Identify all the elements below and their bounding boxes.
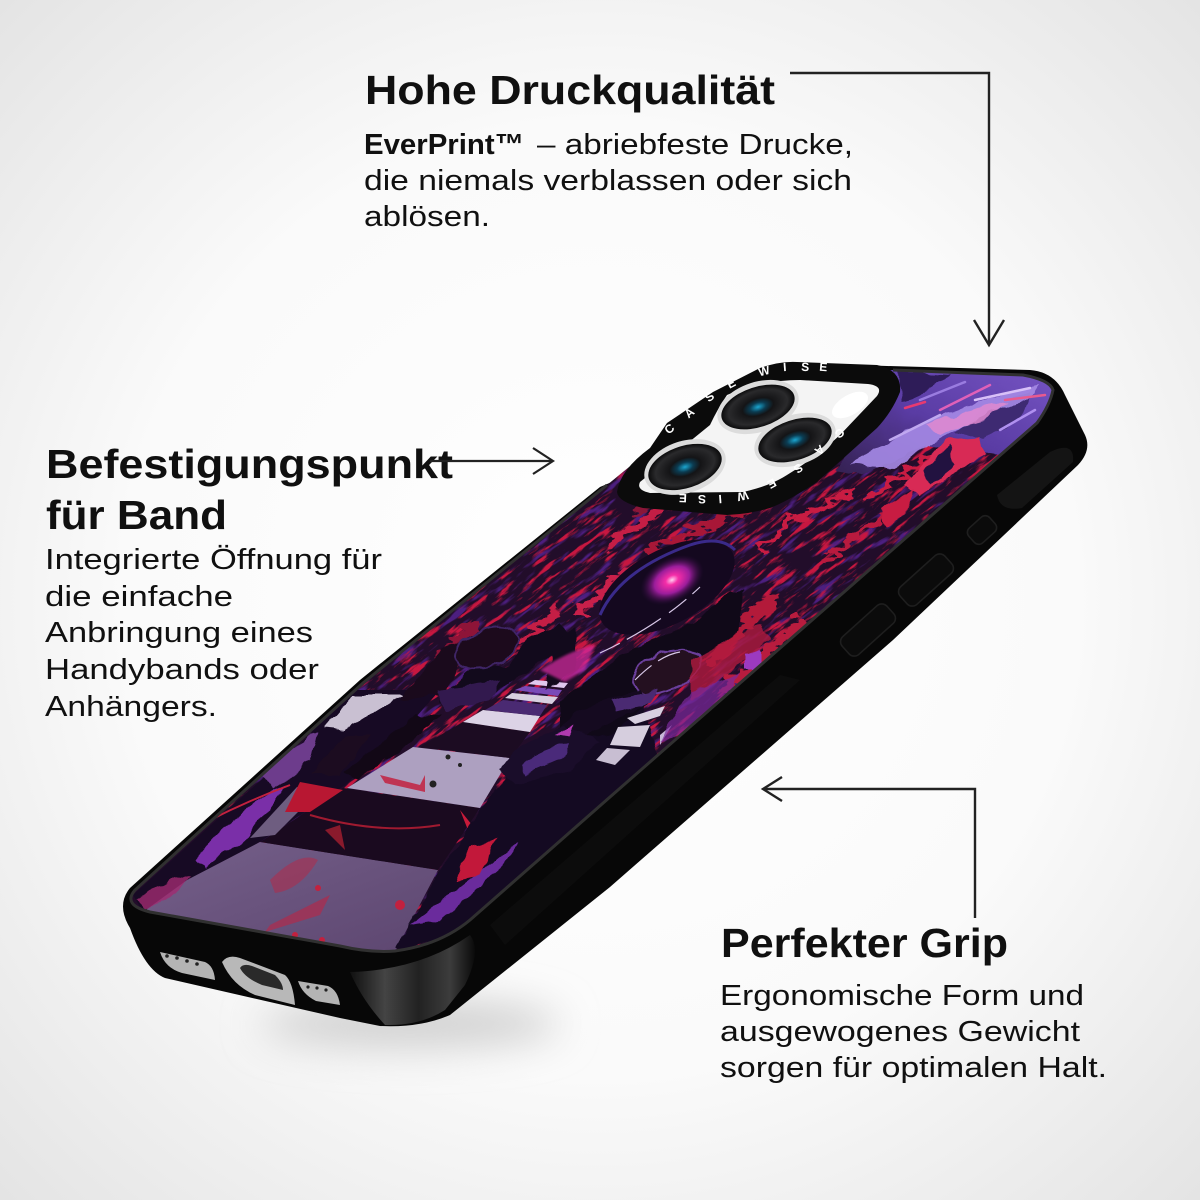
description: Ergonomische Form und	[720, 980, 1084, 1012]
description	[720, 980, 1107, 1084]
phone case product	[123, 362, 1088, 1064]
heading: Befestigungspunkt	[46, 441, 453, 487]
side buttons	[838, 448, 1073, 659]
brush texture: purple and red veins	[228, 446, 998, 946]
camera island	[617, 360, 900, 515]
brand ring text: C	[831, 425, 847, 441]
description	[364, 129, 853, 233]
painted red strokes	[440, 455, 930, 690]
brand ring text: E	[679, 491, 687, 505]
chess board	[143, 680, 568, 952]
blood splatter	[265, 754, 480, 943]
callout: Perfekter Grip	[720, 920, 1107, 1084]
brand ring text: A	[811, 442, 827, 458]
brand ring text: I	[783, 360, 787, 374]
right floor tiles	[596, 706, 672, 765]
description: Anbringung eines	[45, 617, 313, 649]
callout: Hohe Druckqualität	[364, 67, 853, 233]
lens top	[710, 370, 806, 444]
brand ring text: E	[819, 360, 828, 374]
brand ring text: I	[718, 492, 722, 506]
brand ring text: E	[765, 475, 779, 492]
description	[45, 544, 382, 723]
heading	[46, 441, 453, 538]
nebula streaks	[890, 382, 1045, 440]
arrow: strap attachment	[430, 448, 553, 474]
red flare	[881, 437, 986, 528]
left flames	[133, 690, 440, 912]
textured side grip	[490, 675, 800, 945]
description: die einfache	[45, 581, 233, 613]
glass rim	[131, 370, 1053, 951]
description: Anhängers.	[45, 691, 217, 723]
brand ring text: S	[791, 460, 806, 476]
description: ausgewogenes Gewicht	[720, 1016, 1080, 1048]
heading: Hohe Druckqualität	[365, 67, 775, 113]
brand ring text: S	[698, 492, 706, 506]
drop shadow	[260, 1000, 560, 1048]
speaker right	[298, 981, 340, 1005]
description: ablösen.	[364, 201, 490, 233]
chess pieces	[440, 590, 745, 785]
purple nebula	[835, 370, 1052, 474]
camera well	[639, 380, 879, 493]
artwork panel	[132, 370, 1052, 950]
description: – abriebfeste Drucke,	[537, 129, 853, 161]
description: EverPrint™	[364, 129, 524, 161]
glowing eye	[643, 557, 701, 603]
flash	[828, 386, 872, 424]
brand ring text: A	[682, 405, 698, 421]
heading: für Band	[46, 492, 227, 538]
description: Integrierte Öffnung für	[45, 544, 382, 576]
eye dark swirl	[600, 539, 734, 634]
speaker left	[160, 952, 215, 980]
brand ring text: E	[724, 375, 738, 392]
description: Handybands oder	[45, 654, 319, 686]
charging port	[222, 957, 295, 1005]
magenta glow	[540, 645, 595, 682]
brand ring text: C	[662, 421, 678, 437]
brand ring text: S	[702, 389, 717, 405]
brand ring text: S	[801, 360, 810, 374]
glossy corner	[350, 935, 475, 1025]
brand ring text: W	[735, 488, 750, 504]
texture: pale streaks	[772, 208, 1046, 401]
heading: Perfekter Grip	[721, 920, 1008, 966]
lens left	[637, 429, 733, 505]
left flames detail	[135, 640, 470, 910]
right lower dark region	[395, 700, 660, 950]
arrow: print quality	[790, 73, 1004, 345]
brand ring text	[662, 360, 847, 506]
lens right	[747, 403, 843, 477]
callout: Befestigungspunkt für Band	[45, 441, 453, 723]
description: die niemals verblassen oder sich	[364, 165, 852, 197]
piece highlights	[600, 587, 700, 680]
case body	[123, 363, 1087, 1026]
arrow: grip	[763, 777, 975, 918]
description: sorgen für optimalen Halt.	[720, 1052, 1107, 1084]
brand ring text: W	[757, 363, 772, 379]
